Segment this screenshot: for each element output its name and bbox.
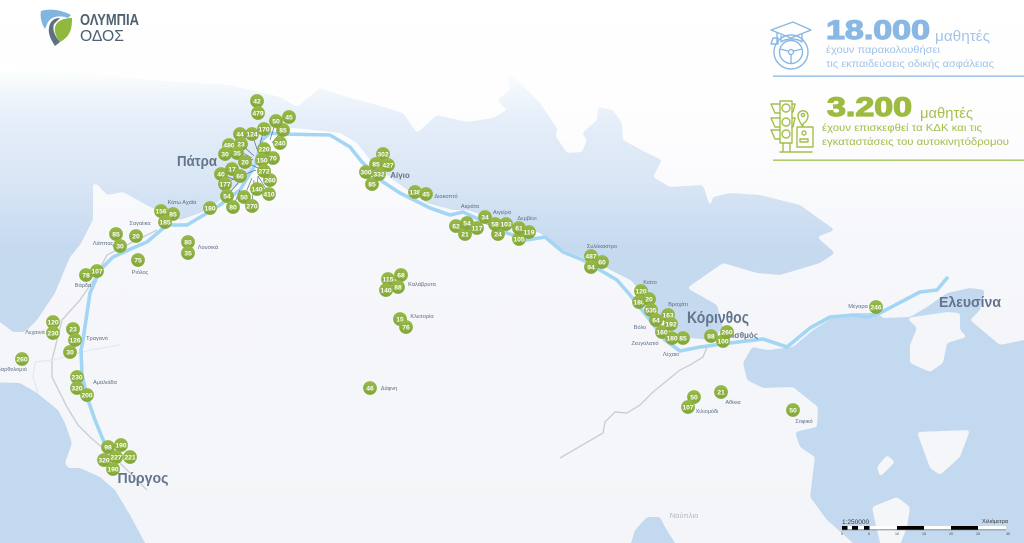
markers: Patra cluster: 85: [279, 127, 287, 134]
markers: western Achaia and Ilia: 156: [155, 208, 167, 215]
markers: Patra cluster: 45: [285, 114, 293, 121]
markers: western Achaia and Ilia: 30: [66, 349, 74, 356]
town labels: Κλειτορία: [410, 314, 434, 320]
city labels: Πύργος: [118, 470, 169, 487]
markers: Aigio to Derveni: 332: [373, 171, 385, 178]
markers: Korinthia: [584, 249, 883, 417]
markers: Patra cluster: 140: [251, 186, 263, 193]
town labels: Δάφνη: [381, 385, 397, 392]
town labels: Καλάβρυτα: [408, 281, 437, 288]
town labels: Αιγείρα: [493, 210, 512, 216]
scale bar: 10: [895, 532, 899, 536]
markers: Aigio to Derveni: 61: [515, 225, 523, 232]
markers: Korinthia: 85: [679, 335, 687, 342]
markers: Patra cluster: 260: [264, 177, 276, 184]
markers: Korinthia: 535: [645, 307, 657, 314]
markers: western Achaia and Ilia: 75: [134, 257, 142, 264]
town labels: Ζευγολατιό: [631, 340, 659, 347]
markers: western Achaia and Ilia: 107: [91, 268, 103, 275]
town labels: Λέχαιο: [663, 351, 679, 358]
town labels: Σοφικό: [795, 418, 813, 425]
markers: Patra cluster: 150: [256, 157, 268, 164]
stat number: 18.000: [826, 15, 930, 45]
town labels: Λεχαινά: [25, 329, 46, 336]
city labels: Κόρινθος: [687, 309, 749, 327]
markers: Aigio to Derveni: 302: [377, 151, 389, 158]
markers: Korinthia: 487: [585, 253, 597, 260]
markers: Aigio to Derveni: 427: [382, 162, 394, 169]
markers: Patra cluster: 20: [241, 159, 249, 166]
markers: Korinthia: 94: [587, 264, 595, 271]
markers: western Achaia and Ilia: 35: [184, 250, 192, 257]
city labels: Ισθμός: [732, 331, 758, 340]
markers: Korinthia: 107: [682, 404, 694, 411]
markers: western Achaia and Ilia: 320: [98, 457, 110, 464]
town labels: Αθίκια: [725, 400, 741, 406]
markers: western Achaia and Ilia: 98: [104, 444, 112, 451]
markers: western Achaia and Ilia: 200: [81, 392, 93, 399]
town labels: Ναύπλιο: [670, 511, 698, 520]
markers: Kalavryta, Kleitoria, Dafni: [363, 268, 413, 395]
stat description: έχουν επισκεφθεί τα ΚΔΚ και τις: [822, 122, 982, 134]
stat unit: μαθητές: [935, 28, 990, 45]
markers: Kalavryta, Kleitoria, Dafni: 115: [383, 276, 394, 283]
markers: Korinthia: 64: [652, 317, 660, 324]
markers: western Achaia and Ilia: 20: [132, 233, 140, 240]
markers: Korinthia: 88: [707, 333, 715, 340]
markers: western Achaia and Ilia: 227: [110, 454, 122, 461]
markers: Patra cluster: 35: [233, 150, 241, 157]
town labels: Βόλο: [634, 324, 646, 331]
town labels: Διακοπτό: [434, 193, 458, 200]
city labels: Ελευσίνα: [939, 294, 1002, 311]
icon: traffic light and location: [771, 101, 813, 152]
markers: Patra cluster: 50: [272, 118, 280, 125]
markers: western Achaia and Ilia: 185: [159, 219, 171, 226]
sea: Ionian south-west: [0, 382, 160, 543]
panel: 18.000 students: τις εκπαιδεύσεις οδικής ασφάλειας: [826, 58, 994, 70]
sea: Patraikos and Corinthian gulf: [0, 60, 835, 340]
markers: Patra cluster: 50: [240, 194, 248, 201]
markers: western Achaia and Ilia: [15, 204, 195, 476]
markers: Patra cluster: 44: [236, 131, 244, 138]
markers: Patra cluster: 272: [258, 168, 270, 175]
markers: western Achaia and Ilia: 80: [184, 239, 192, 246]
markers: Patra cluster: 30: [221, 151, 229, 158]
panel: 3.200 students: [771, 92, 1009, 152]
markers: Korinthia: 100: [717, 338, 729, 345]
markers: Korinthia: 120: [635, 288, 647, 295]
markers: Kalavryta, Kleitoria, Dafni: 68: [397, 272, 405, 279]
town labels: Ακράτα: [461, 203, 480, 210]
markers: Patra cluster: 479: [252, 110, 264, 117]
markers: western Achaia and Ilia: 190: [107, 466, 119, 473]
markers: Patra cluster: 410: [263, 191, 275, 198]
city labels: [118, 153, 1002, 487]
markers: Patra cluster: [203, 94, 296, 215]
logo: Olympia Odos: [41, 10, 139, 46]
markers: Patra cluster: 177: [219, 181, 231, 188]
sea: Saronic gulf: [743, 288, 1024, 543]
markers: Korinthia: 50: [690, 394, 698, 401]
land: islands: [872, 312, 970, 543]
markers: Korinthia: 160: [656, 329, 668, 336]
markers: western Achaia and Ilia: 230: [47, 330, 59, 337]
markers: Patra cluster: 170: [258, 126, 270, 133]
markers: Korinthia: 20: [645, 296, 653, 303]
town labels: Τραγανό: [86, 335, 108, 342]
markers: western Achaia and Ilia: 78: [82, 272, 90, 279]
logo wordmark: ΟΛΥΜΠΙΑ: [80, 12, 139, 29]
markers: western Achaia and Ilia: 30: [116, 243, 124, 250]
town labels: Ριόλος: [132, 269, 149, 276]
scale bar: 20: [949, 532, 953, 536]
markers: Patra cluster: 54: [223, 193, 231, 200]
stat number: 3.200: [827, 92, 912, 122]
markers: Korinthia: 260: [721, 329, 733, 336]
markers: western Achaia and Ilia: 230: [71, 374, 83, 381]
markers: Kalavryta, Kleitoria, Dafni: 88: [394, 284, 402, 291]
sea: Argolic bay: [625, 517, 690, 543]
markers: Aigio to Derveni: 24: [494, 231, 502, 238]
markers: Aigio to Derveni: 300: [360, 169, 372, 176]
markers: Aigio to Derveni: 117: [472, 225, 483, 232]
scale bar: [841, 518, 1010, 536]
markers: western Achaia and Ilia: 126: [69, 337, 81, 344]
leader lines: Patra cluster: [221, 121, 283, 207]
markers: Korinthia: 180: [633, 299, 645, 306]
scale bar: 1:250000: [842, 519, 869, 526]
markers: western Achaia and Ilia: 23: [69, 326, 77, 333]
markers: Patra cluster: 270: [246, 203, 258, 210]
markers: Aigio to Derveni: 105: [513, 236, 525, 243]
markers: Aigio to Derveni: 21: [461, 231, 469, 238]
markers: Patra cluster: 240: [274, 140, 286, 147]
markers: Patra cluster: 17: [228, 166, 236, 173]
scale bar: 5: [868, 532, 870, 536]
markers: Aigio to Derveni: 103: [500, 221, 512, 228]
town labels: Κιάτο: [643, 279, 657, 286]
scale bar: Χιλιόμετρα: [982, 518, 1009, 525]
markers: Patra cluster: 480: [223, 142, 235, 149]
markers: Korinthia: 21: [717, 389, 725, 396]
markers: Aigio to Derveni: 85: [368, 181, 376, 188]
town labels: Μέγαρα: [848, 303, 869, 310]
markers: Korinthia: 60: [598, 259, 606, 266]
town labels: Βάρδα: [75, 282, 92, 289]
markers: Patra cluster: 40: [217, 171, 225, 178]
markers: Aigio to Derveni: 54: [463, 220, 471, 227]
city labels: Πάτρα: [177, 153, 218, 170]
markers: western Achaia and Ilia: 120: [47, 319, 59, 326]
markers: Korinthia: 50: [789, 407, 797, 414]
markers: Korinthia: 163: [662, 312, 674, 319]
markers: Patra cluster: 180: [204, 205, 216, 212]
markers: Patra cluster: 70: [269, 155, 277, 162]
stat unit: μαθητές: [920, 105, 973, 122]
markers: Patra cluster: 60: [236, 173, 244, 180]
town labels: Δερβένι: [517, 215, 537, 222]
roads: old railway and secondary roads: [33, 230, 707, 490]
icon: graduation cap and steering wheel: [771, 22, 811, 69]
markers: Korinthia: 180: [666, 335, 678, 342]
scale bar: 25: [976, 532, 980, 536]
town labels: Χιλιομόδι: [696, 408, 719, 415]
scale bar: 15: [922, 532, 926, 536]
town labels: Κάτω Αχαΐα: [168, 199, 197, 206]
markers: western Achaia and Ilia: 221: [124, 454, 136, 461]
town labels: Συλόκαστρο: [587, 243, 617, 250]
markers: Aigio to Derveni: 138: [409, 189, 421, 196]
markers: Patra cluster: 80: [229, 204, 237, 211]
markers: western Achaia and Ilia: 260: [16, 356, 28, 363]
markers: Aigio to Derveni: 119: [524, 229, 535, 236]
town labels: Λάππας: [93, 240, 114, 247]
town labels: Σαγαίικα: [129, 221, 151, 227]
markers: Patra cluster: 124: [246, 131, 258, 138]
markers: Patra cluster: 42: [253, 98, 261, 105]
motorway: Olympia Odos: [81, 133, 947, 447]
markers: western Achaia and Ilia: 85: [169, 211, 177, 218]
town labels: Λουσικά: [198, 244, 219, 251]
panel: 3.200 students: εγκαταστάσεις του αυτοκινητόδρομου: [822, 136, 1009, 148]
town labels: Βραχάτι: [668, 301, 689, 308]
markers: Aigio to Derveni: 34: [481, 214, 489, 221]
markers: western Achaia and Ilia: 85: [112, 231, 120, 238]
stat description: έχουν παρακολουθήσει: [826, 44, 940, 56]
logo: Olympia Odos: ΟΔΟΣ: [80, 28, 124, 45]
markers: Kalavryta, Kleitoria, Dafni: 15: [396, 316, 404, 323]
markers: Aigio to Derveni: 58: [491, 221, 499, 228]
markers: Kalavryta, Kleitoria, Dafni: 46: [366, 385, 374, 392]
markers: Patra cluster: 220: [258, 146, 270, 153]
markers: Aigio to Derveni: 62: [452, 223, 460, 230]
scale bar: 0: [841, 532, 843, 536]
town labels: [0, 193, 869, 520]
markers: Aigio to Derveni: 85: [372, 161, 380, 168]
markers: western Achaia and Ilia: 190: [115, 442, 127, 449]
scale bar: 30: [1006, 532, 1010, 536]
logo mark: [41, 10, 72, 46]
markers: Patra cluster: 23: [237, 141, 245, 148]
markers: Aigio to Derveni: 45: [422, 191, 430, 198]
markers: Korinthia: 246: [870, 304, 882, 311]
markers: Aigio to Derveni: [359, 147, 536, 246]
markers: Kalavryta, Kleitoria, Dafni: 76: [402, 324, 410, 331]
city labels: Αίγιο: [390, 171, 410, 180]
town labels: Αμαλιάδα: [93, 379, 118, 386]
panel: 18.000 students: [771, 15, 994, 70]
markers: Korinthia: 192: [665, 321, 677, 328]
markers: Kalavryta, Kleitoria, Dafni: 140: [380, 287, 392, 294]
markers: western Achaia and Ilia: 320: [71, 385, 83, 392]
